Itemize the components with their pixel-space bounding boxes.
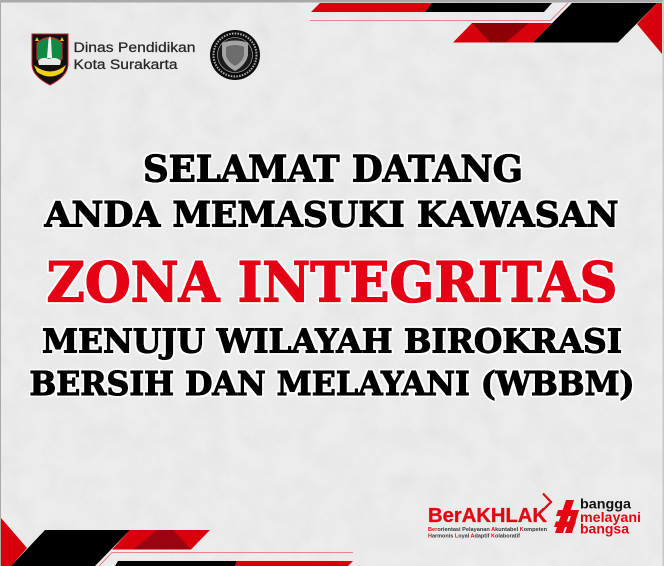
headline: selamat datang: SELAMAT DATANG bbox=[143, 148, 523, 190]
organisation name: Dinas Pendidikan bbox=[74, 40, 196, 56]
BerAKHLAK logo bbox=[428, 494, 551, 540]
icon: hashtag bbox=[554, 500, 579, 533]
logo: Kota Surakarta shield bbox=[32, 34, 68, 85]
organisation name bbox=[74, 40, 196, 73]
headline: zona integritas: ZONA INTEGRITAS bbox=[46, 250, 618, 314]
bottom left decoration bbox=[1, 518, 353, 566]
bangga melayani bangsa: bangga bbox=[580, 496, 632, 512]
BerAKHLAK logo: BerAKHLAK bbox=[428, 505, 548, 527]
bangga melayani bangsa: bangsa bbox=[580, 522, 630, 536]
headline: anda memasuki kawasan: ANDA MEMASUKI KAWASAN bbox=[44, 194, 619, 236]
bangga melayani bangsa bbox=[580, 496, 641, 536]
BerAKHLAK logo: Berorientasi Pelayanan Akuntabel Kompeten bbox=[428, 527, 548, 533]
subheading: menuju wilayah birokrasi: MENUJU WILAYAH BIROKRASI bbox=[42, 322, 622, 360]
top right decoration bbox=[310, 3, 662, 54]
logo: round emblem bbox=[210, 30, 260, 80]
BerAKHLAK logo: Harmonis Loyal Adaptif Kolaboratif bbox=[428, 534, 520, 540]
organisation name: Kota Surakarta bbox=[74, 57, 178, 73]
bangga melayani bangsa: melayani bbox=[580, 510, 641, 525]
subheading: bersih dan melayani: BERSIH DAN MELAYANI (WBBM) bbox=[30, 364, 634, 403]
